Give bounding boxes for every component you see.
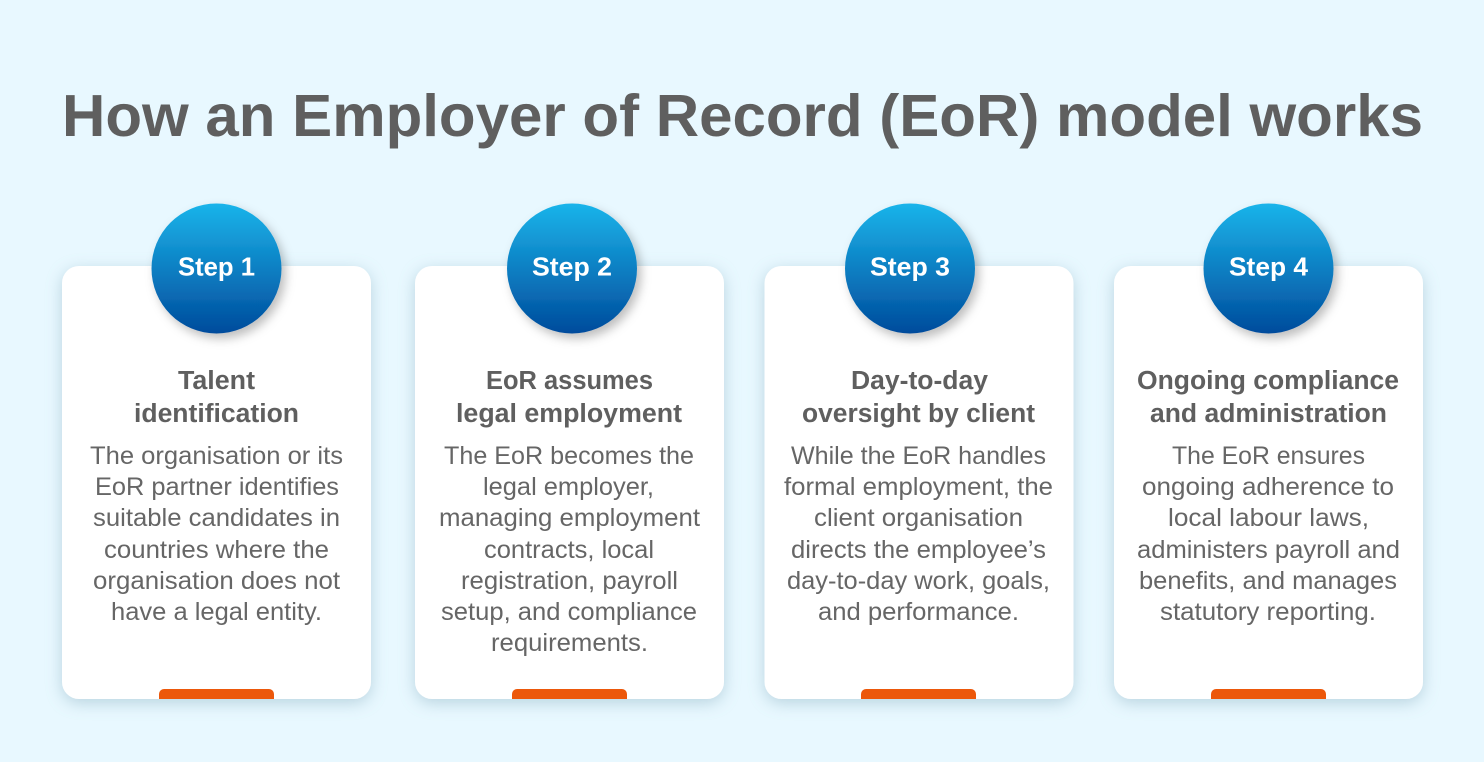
step 4 description: administers payroll and <box>1137 536 1400 564</box>
panel: step 2 EoR assumes legal employment <box>415 204 724 709</box>
step 4 heading: Ongoing compliance <box>1137 367 1399 395</box>
step 2 description: setup, and compliance <box>441 598 697 626</box>
step 4 description <box>1137 442 1400 626</box>
step 2 heading: EoR assumes <box>486 367 653 395</box>
step 2 description: registration, payroll <box>461 567 678 595</box>
step 1 description: The organisation or its <box>90 442 343 470</box>
step 1 badge <box>152 204 282 334</box>
step 2 description: requirements. <box>491 629 648 657</box>
step 4 heading <box>1137 367 1399 428</box>
step 1 description: have a legal entity. <box>111 598 322 626</box>
step 4 description: benefits, and manages <box>1139 567 1397 595</box>
step 3 description: directs the employee’s <box>791 536 1046 564</box>
step 4 description: The EoR ensures <box>1172 442 1365 470</box>
title: How an Employer of Record (EoR) model works <box>62 83 1423 149</box>
step 2 description <box>439 442 700 657</box>
step 1 description: organisation does not <box>93 567 340 595</box>
step 2 description: managing employment <box>439 504 700 532</box>
step 3 description: and performance. <box>818 598 1019 626</box>
step 3 heading: oversight by client <box>802 400 1036 428</box>
orange accent bar 2 <box>512 689 627 699</box>
step 3 heading: Day-to-day <box>851 367 989 395</box>
step 1 description <box>90 442 343 626</box>
step 1 badge: Step 1 <box>178 252 255 282</box>
card background 4 <box>1114 266 1423 699</box>
panel: step 4 ongoing compliance and administration <box>1114 204 1423 709</box>
card background 2 <box>415 266 724 699</box>
step 1 heading <box>134 367 299 428</box>
step 4 heading: and administration <box>1150 400 1387 428</box>
step 3 description: formal employment, the <box>784 473 1053 501</box>
step 2 heading <box>456 367 683 428</box>
step 3 description: client organisation <box>814 504 1023 532</box>
step 3 badge: Step 3 <box>870 252 950 282</box>
step 2 description: contracts, local <box>484 536 654 564</box>
panel: step 1 talent identification <box>62 204 371 709</box>
step 2 heading: legal employment <box>456 400 683 428</box>
step 2 badge <box>507 204 637 334</box>
card background 1 <box>62 266 371 699</box>
step 1 description: EoR partner identifies <box>95 473 339 501</box>
step 1 description: suitable candidates in <box>93 504 340 532</box>
step 4 description: local labour laws, <box>1168 504 1369 532</box>
orange accent bar 3 <box>861 689 976 699</box>
panel: step 3 day-to-day oversight by client <box>764 204 1074 709</box>
orange accent bar 1 <box>159 689 274 699</box>
step 4 description: ongoing adherence to <box>1142 473 1394 501</box>
step 3 description: day-to-day work, goals, <box>787 567 1050 595</box>
step 1 heading: Talent <box>178 367 256 395</box>
step 2 description: legal employer, <box>483 473 654 501</box>
step 1 heading: identification <box>134 400 299 428</box>
step 3 badge <box>845 204 975 334</box>
step 2 description: The EoR becomes the <box>444 442 694 470</box>
card background 3 <box>764 266 1074 699</box>
step 4 badge <box>1204 204 1334 334</box>
step 2 badge: Step 2 <box>532 252 612 282</box>
step 4 badge: Step 4 <box>1229 252 1309 282</box>
step 3 description <box>784 442 1053 626</box>
step 1 description: countries where the <box>104 536 329 564</box>
orange accent bar 4 <box>1211 689 1326 699</box>
step 3 description: While the EoR handles <box>791 442 1046 470</box>
step 3 heading <box>802 367 1036 428</box>
step 4 description: statutory reporting. <box>1160 598 1376 626</box>
